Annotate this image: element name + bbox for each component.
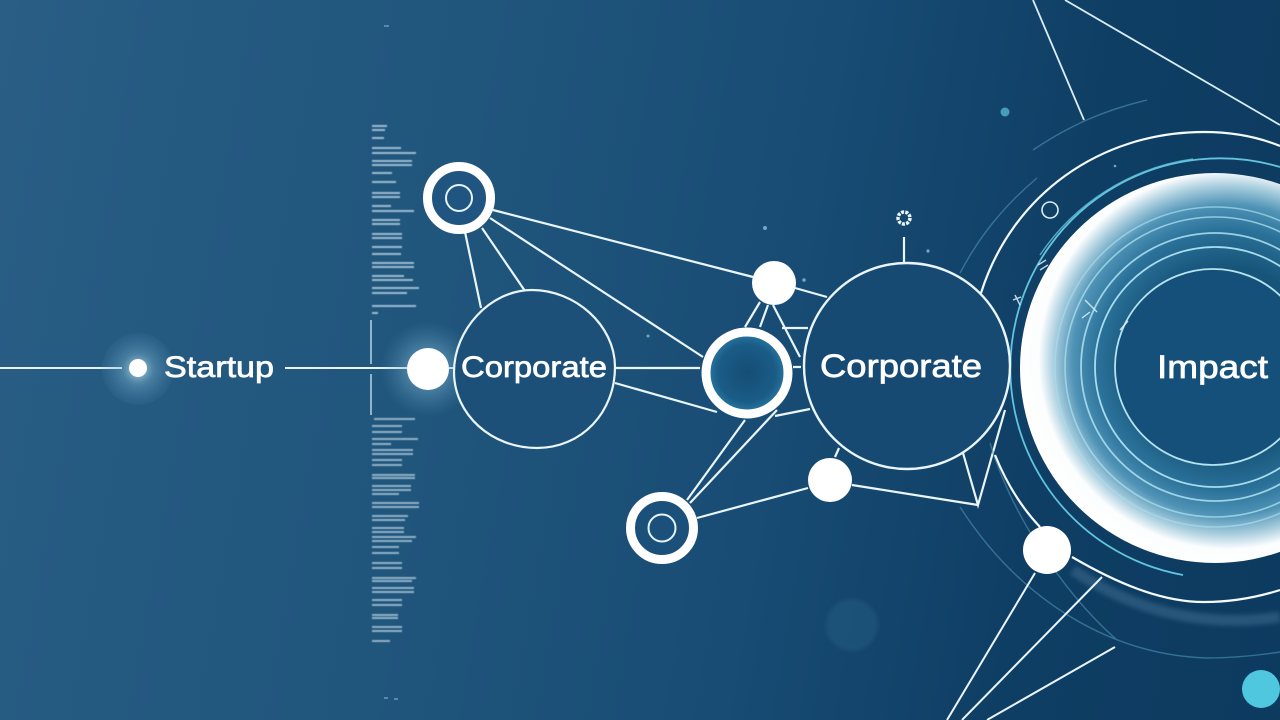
vertical divider — [370, 320, 372, 415]
faint wide band — [1073, 570, 1280, 620]
small top and bottom marks — [384, 26, 398, 699]
network connector lines — [465, 210, 1005, 518]
white node on ring — [1023, 526, 1071, 574]
connector from startup to node — [285, 367, 455, 369]
white node upper — [752, 261, 796, 305]
startup input line — [0, 367, 122, 369]
upper text lines column — [372, 126, 419, 313]
white node lower — [808, 458, 852, 502]
impact sphere — [1020, 173, 1280, 563]
label: Startup: Startup — [164, 351, 274, 384]
circle: Corporate (large) — [804, 263, 1010, 469]
faint outer arcs — [960, 100, 1280, 658]
bottom ring node — [630, 496, 694, 560]
startup node with glow — [102, 333, 174, 405]
lower text lines column — [372, 419, 419, 641]
cyan dot bottom right — [1242, 670, 1280, 708]
secondary cyan arc — [1040, 159, 1193, 255]
circle: Corporate (small) — [454, 290, 615, 448]
lower right lines — [947, 573, 1115, 720]
top ring node — [428, 166, 490, 230]
inner circle — [1115, 269, 1280, 465]
outer white ring — [981, 132, 1280, 602]
faint cyan dot — [1000, 108, 1010, 116]
upper right lines — [1033, 0, 1280, 125]
label: Corporate (small): Corporate — [461, 351, 607, 384]
sphere inner rings — [1055, 207, 1280, 527]
icon: gear — [898, 212, 910, 224]
small particles — [646, 165, 1116, 338]
faint circle — [826, 599, 878, 651]
small ring marker — [1042, 202, 1058, 218]
label: Impact: Impact — [1157, 349, 1268, 385]
sphere surface specks — [1013, 260, 1128, 330]
central ring node — [706, 332, 788, 414]
glowing junction node — [380, 321, 476, 417]
label: Corporate (large): Corporate — [820, 348, 982, 384]
cyan ring — [1010, 158, 1280, 575]
